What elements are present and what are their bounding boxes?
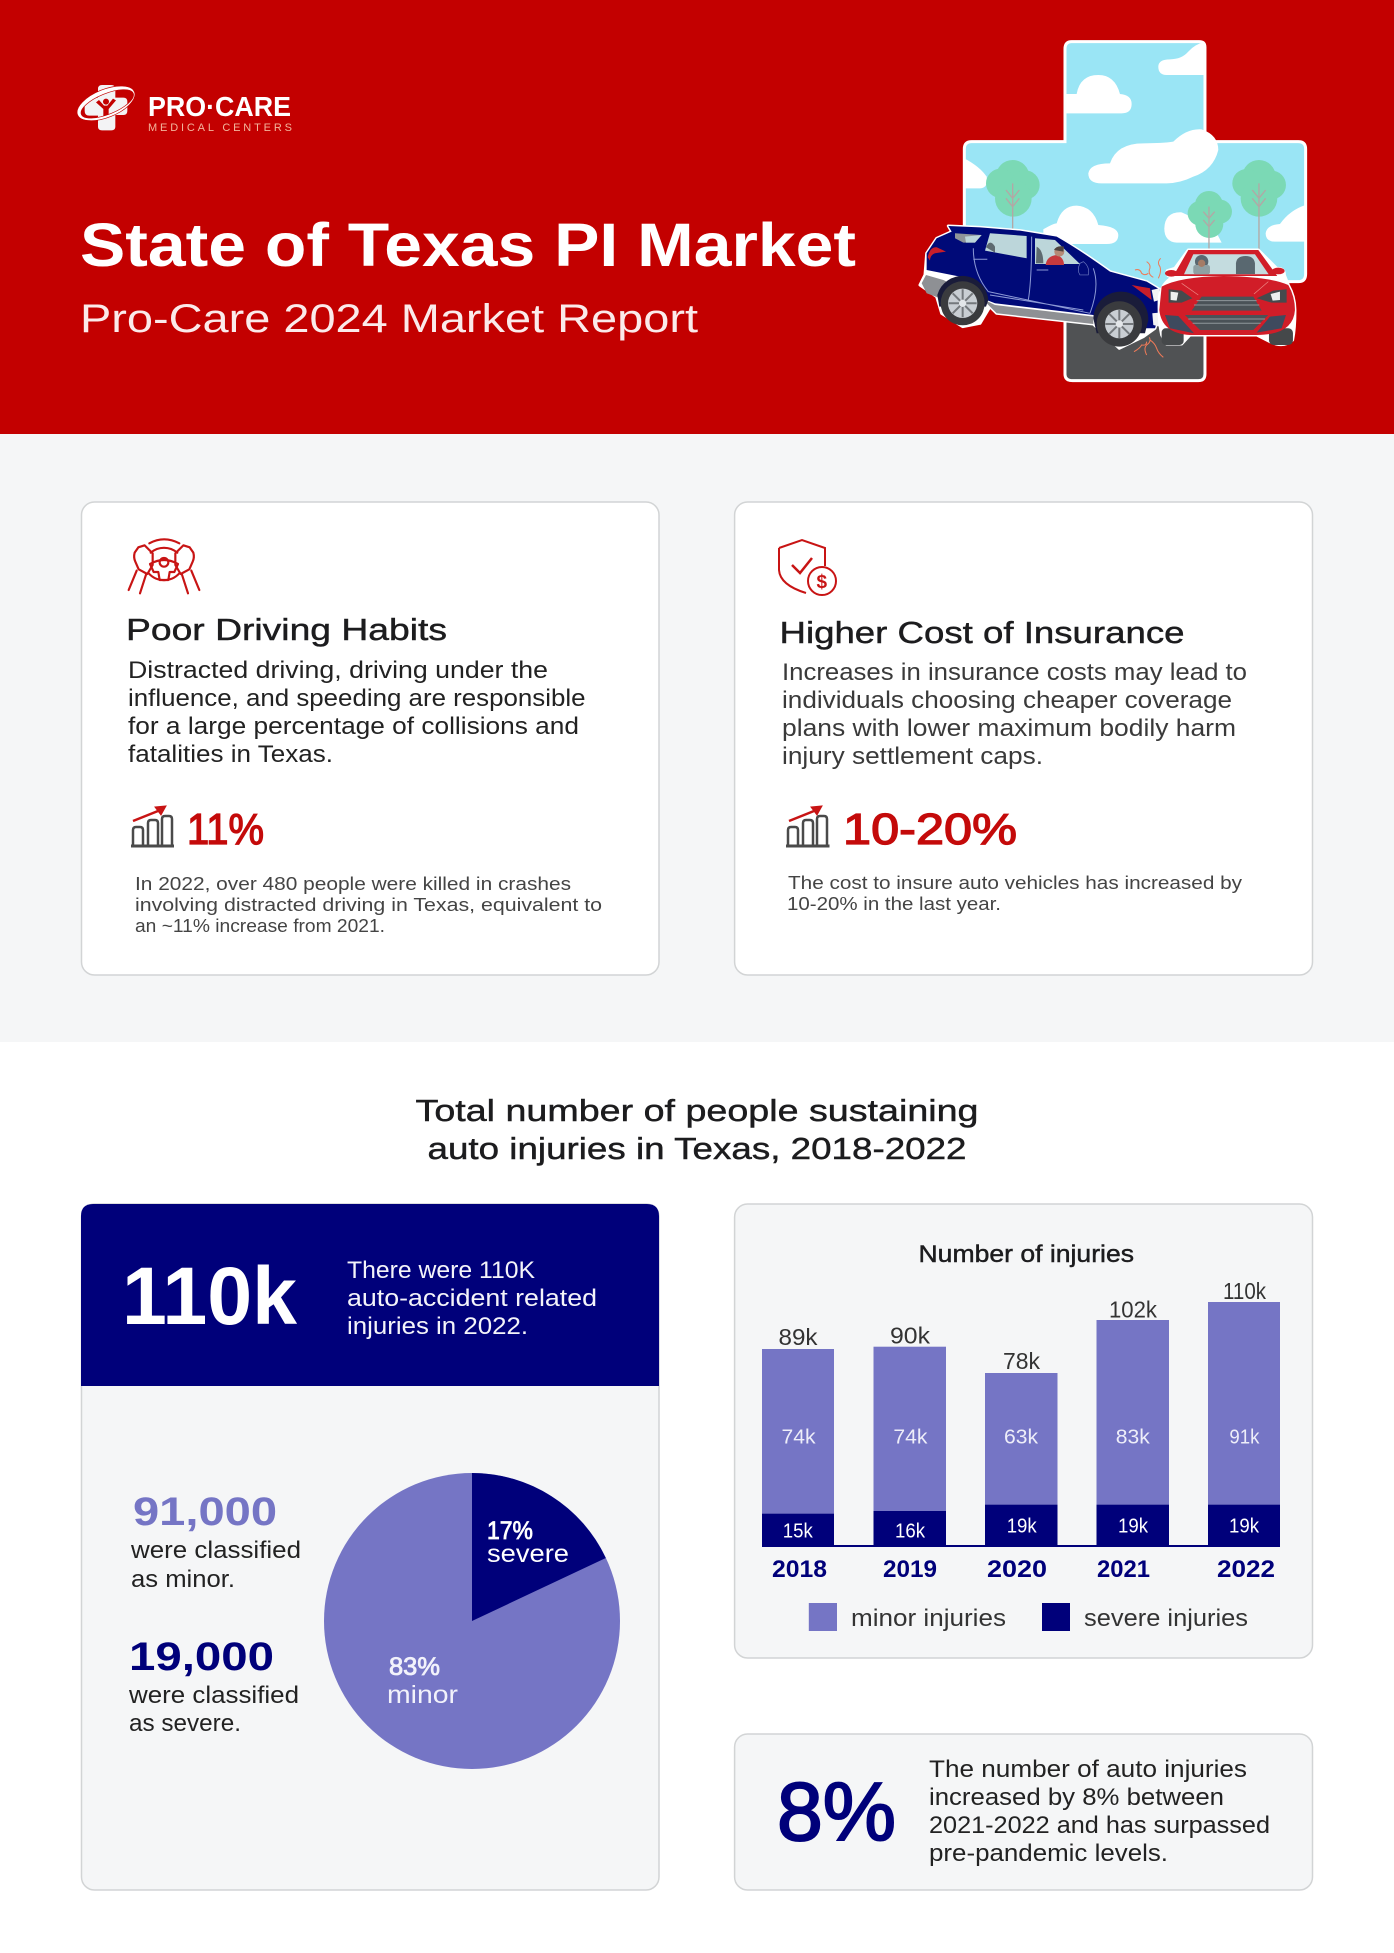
- stat: minor count: 91,000: [133, 1490, 277, 1534]
- body text: influence, and speeding are responsible: [128, 685, 586, 712]
- stat: 11%: 11%: [187, 805, 264, 854]
- icon: shield with dollar: [779, 540, 836, 595]
- stat description: The cost to insure auto vehicles has increased by: [788, 873, 1242, 893]
- illustration: car collision on medical cross: [920, 42, 1306, 383]
- total labels: [778, 1278, 1266, 1374]
- legend: [809, 1603, 1248, 1632]
- pie label: severe: 17%: [487, 1517, 533, 1545]
- stacked bars: [762, 1278, 1280, 1547]
- pie label: severe: [487, 1517, 569, 1568]
- minor labels: 74k: [893, 1427, 928, 1449]
- section heading: auto injuries in Texas, 2018-2022: [428, 1131, 966, 1166]
- severe labels: 19k: [1118, 1516, 1149, 1538]
- body text: for a large percentage of collisions and: [128, 713, 579, 740]
- total labels: 90k: [890, 1323, 931, 1349]
- panel: 110k injuries and pie chart: [81, 1204, 659, 1890]
- year labels: 2021: [1097, 1556, 1150, 1583]
- heading: Poor Driving Habits: [126, 612, 447, 647]
- logo tagline: MEDICAL CENTERS: [148, 122, 292, 134]
- minor labels: 63k: [1004, 1427, 1039, 1449]
- banner text: There were 110K: [347, 1257, 535, 1284]
- panel: number of injuries bar chart: [735, 1204, 1312, 1658]
- callout: 110k banner: [81, 1204, 659, 1386]
- logo wordmark: PRO·CARE: [148, 91, 291, 122]
- icon: medical cross with person: [72, 79, 140, 130]
- panel: higher cost of insurance: [735, 502, 1312, 975]
- heading: Higher Cost of Insurance: [780, 615, 1184, 650]
- total labels: 89k: [778, 1324, 818, 1350]
- year labels: 2020: [987, 1556, 1047, 1583]
- body text: Distracted driving, driving under the: [128, 657, 548, 684]
- minor labels: 74k: [782, 1427, 817, 1449]
- stat description: In 2022, over 480 people were killed in crashes: [135, 874, 571, 894]
- year labels: 2022: [1217, 1556, 1275, 1583]
- total labels: 102k: [1109, 1297, 1157, 1323]
- icon: rising bar chart: [786, 806, 830, 846]
- legend: minor injuries: [851, 1605, 1006, 1632]
- legend: severe injuries: [1084, 1605, 1248, 1632]
- panel: 8% increase callout: [735, 1734, 1312, 1890]
- big stat: 8%: 8%: [777, 1765, 896, 1858]
- section heading: [416, 1093, 978, 1166]
- stat: 10-20%: 10-20%: [843, 805, 1017, 854]
- year labels: [772, 1556, 1275, 1583]
- minor bars: [762, 1302, 1280, 1514]
- severe labels: 19k: [1229, 1516, 1260, 1538]
- severe labels: 15k: [783, 1521, 814, 1543]
- subtitle: Pro-Care 2024 Market Report: [80, 297, 698, 341]
- chart title: Number of injuries: [918, 1241, 1134, 1268]
- body text: [782, 659, 1247, 770]
- body text: fatalities in Texas.: [128, 741, 333, 768]
- stat: minor count: were classified: [130, 1537, 301, 1564]
- stat: severe count: as severe.: [129, 1710, 241, 1737]
- year labels: 2018: [772, 1556, 827, 1583]
- banner text: injuries in 2022.: [347, 1313, 528, 1340]
- pie chart: [324, 1473, 620, 1769]
- panel: poor driving habits: [82, 502, 659, 975]
- section heading: Total number of people sustaining: [416, 1093, 978, 1128]
- icon: hands on steering wheel: [129, 539, 199, 593]
- title: State of Texas PI Market: [80, 211, 856, 279]
- severe labels: 16k: [895, 1521, 926, 1543]
- stat description: [787, 873, 1242, 914]
- minor labels: 83k: [1116, 1427, 1151, 1449]
- severe bars: [762, 1505, 1280, 1547]
- banner text: auto-accident related: [347, 1285, 597, 1312]
- body text: plans with lower maximum bodily harm: [782, 715, 1236, 742]
- stat description: involving distracted driving in Texas, equivalent to: [135, 895, 602, 915]
- big number: 110k: [122, 1251, 297, 1342]
- body text: Increases in insurance costs may lead to: [782, 659, 1247, 686]
- body text: individuals choosing cheaper coverage: [782, 687, 1232, 714]
- cross with sky and road: [964, 42, 1306, 383]
- stat description: an ~11% increase from 2021.: [135, 916, 385, 936]
- callout text: The number of auto injuries: [929, 1756, 1247, 1783]
- stat description: 10-20% in the last year.: [787, 894, 1001, 914]
- icon: impact sparks: [1134, 258, 1163, 357]
- total labels: 110k: [1223, 1278, 1266, 1304]
- body text: [128, 657, 586, 768]
- callout text: increased by 8% between: [929, 1784, 1224, 1811]
- icon: shield with dollar: $: [816, 572, 828, 593]
- callout text: 2021-2022 and has surpassed: [929, 1812, 1270, 1839]
- banner text: [347, 1257, 597, 1340]
- stat: severe count: 19,000: [129, 1635, 274, 1679]
- pie label: minor: minor: [387, 1681, 458, 1709]
- header banner: [0, 0, 1394, 434]
- pie label: minor: 83%: [389, 1653, 440, 1681]
- callout text: [929, 1756, 1270, 1867]
- logo: Pro-Care Medical Centers: [72, 79, 292, 134]
- total labels: 78k: [1003, 1348, 1040, 1374]
- icon: red car: [1159, 250, 1295, 345]
- body text: injury settlement caps.: [782, 743, 1043, 770]
- severe labels: [783, 1516, 1260, 1543]
- stat: minor count: as minor.: [131, 1566, 235, 1593]
- stat: severe count: [128, 1635, 299, 1737]
- callout text: pre-pandemic levels.: [929, 1840, 1168, 1867]
- trees: [986, 160, 1286, 253]
- stat: severe count: were classified: [128, 1682, 299, 1709]
- stat: minor count: [130, 1490, 301, 1593]
- icon: rising bar chart: [131, 806, 174, 846]
- year labels: 2019: [883, 1556, 937, 1583]
- minor labels: 91k: [1229, 1427, 1260, 1449]
- pie label: severe: severe: [487, 1540, 569, 1568]
- minor labels: [782, 1427, 1260, 1449]
- pie label: minor: [387, 1653, 458, 1709]
- icon: blue SUV: [920, 226, 1160, 348]
- severe labels: 19k: [1007, 1516, 1038, 1538]
- stat description: [135, 874, 602, 936]
